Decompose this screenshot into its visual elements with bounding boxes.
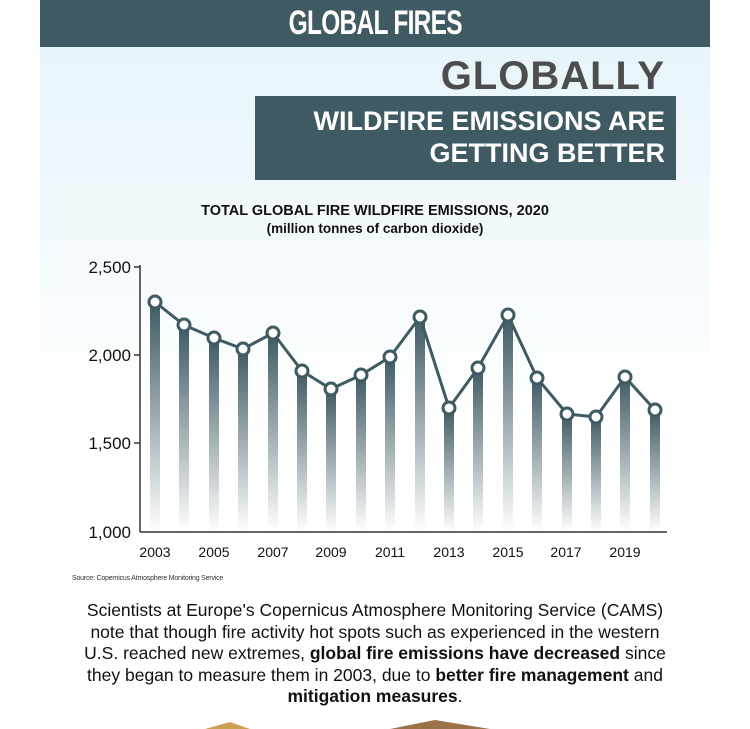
header bar: [40, 0, 710, 47]
line chart: 1,000: [88, 523, 131, 542]
body text: Scientists at Europe's Copernicus Atmosphere Monitoring Service (CAMS) note that though fire activity hot spots such as experienced in the western U.S. reached new extremes, global fire emissions have decreased since they began to measure them in 2003, due to better fire management and mitigation measures.: [84, 600, 666, 706]
decorative bottom shapes: [205, 720, 490, 729]
line chart: 2,500: [88, 258, 131, 277]
line chart: 2013: [433, 544, 465, 560]
line chart: 2007: [257, 544, 289, 560]
line chart: 1,500: [88, 434, 131, 453]
line chart: 2009: [315, 544, 347, 560]
heading: GLOBALLY: GLOBALLY: [441, 54, 665, 98]
header bar: GLOBAL FIRES: [288, 4, 462, 42]
line chart: 2011: [375, 544, 405, 560]
chart title: [201, 203, 549, 236]
subtitle box: [255, 96, 676, 180]
line chart: 2003: [139, 544, 171, 560]
chart title: TOTAL GLOBAL FIRE WILDFIRE EMISSIONS, 2020: [201, 203, 549, 219]
source note: Source: Copernicus Atmosphere Monitoring Service: [72, 575, 223, 582]
line chart: 2019: [609, 544, 641, 560]
line chart: 2017: [550, 544, 582, 560]
line chart: 2015: [492, 544, 524, 560]
line chart: 2005: [198, 544, 230, 560]
line chart: 2,000: [88, 346, 131, 365]
subtitle box: WILDFIRE EMISSIONS ARE: [313, 106, 665, 136]
subtitle box: GETTING BETTER: [430, 138, 665, 168]
chart title: (million tonnes of carbon dioxide): [267, 221, 483, 236]
